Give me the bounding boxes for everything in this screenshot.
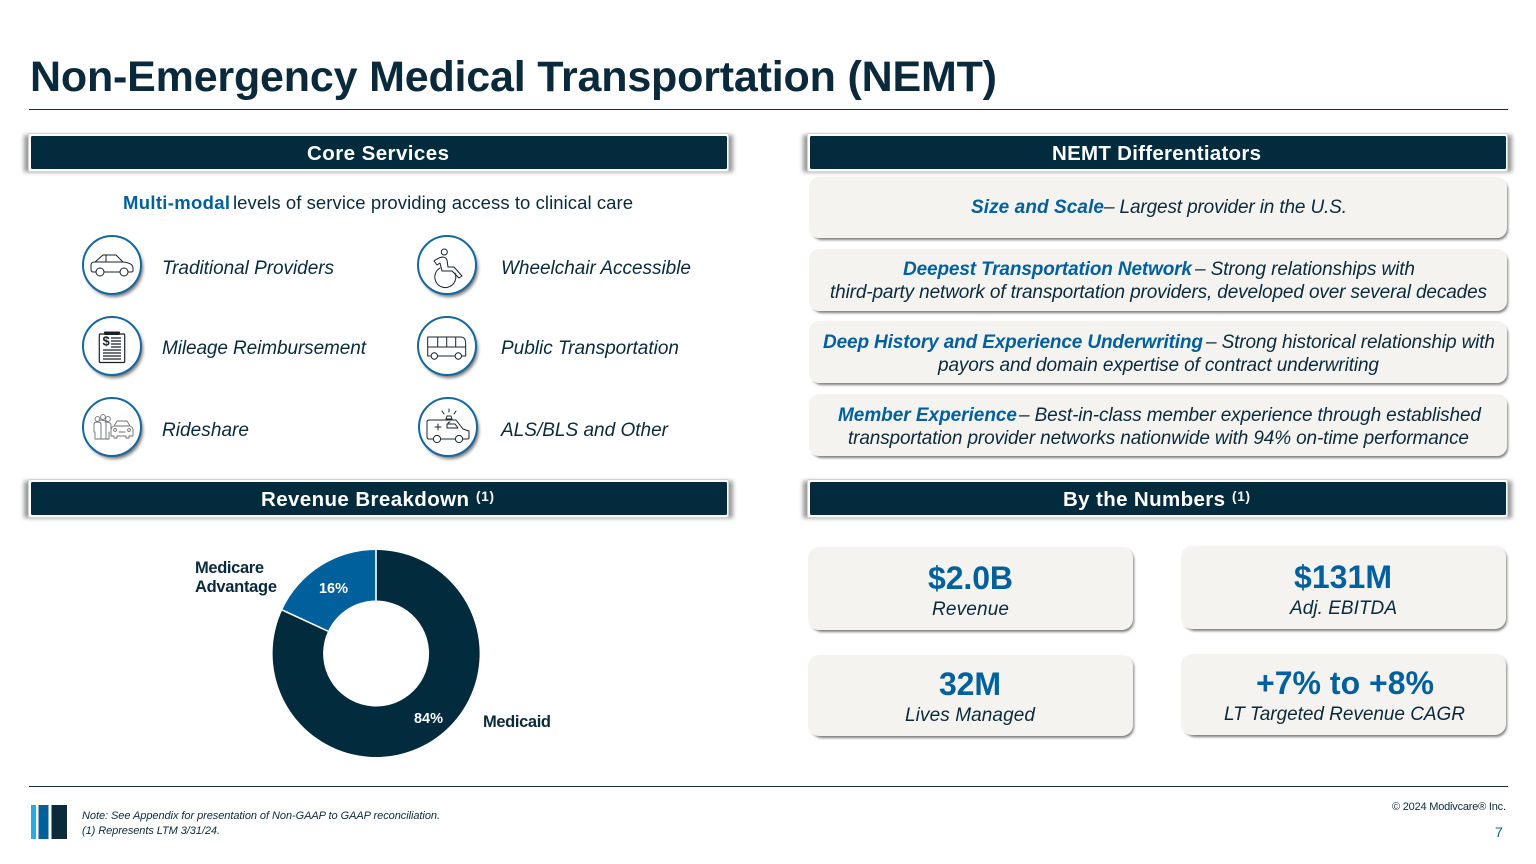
card: member experience bbox=[809, 394, 1508, 458]
card: deep history and experience underwriting: – Strong historical relationship with bbox=[1205, 332, 1495, 353]
label: Medicare Advantage: Medicare bbox=[195, 559, 264, 577]
service: wheelchair accessible bbox=[418, 236, 691, 297]
service: mileage reimbursement: Mileage Reimbursement bbox=[162, 338, 367, 359]
panel header: Core Services: Core Services bbox=[307, 142, 449, 165]
stat: LT targeted revenue CAGR: +7% to +8% bbox=[1256, 665, 1434, 701]
panel: by the numbers bbox=[808, 546, 1507, 738]
page number: 7 bbox=[1495, 824, 1503, 840]
stat: revenue: $2.0B bbox=[928, 560, 1013, 596]
service: ALS/BLS and other bbox=[419, 398, 669, 459]
panel: differentiators bbox=[809, 177, 1508, 458]
stat: revenue bbox=[808, 547, 1134, 632]
card: deep history and experience underwriting: payors and domain expertise of contract underwriting bbox=[937, 355, 1379, 376]
panel: core services bbox=[83, 192, 691, 459]
stat: lives managed: 32M bbox=[939, 666, 1001, 702]
icon: people and car bbox=[94, 415, 133, 439]
service: traditional providers: Traditional Providers bbox=[162, 258, 334, 279]
card: deepest transportation network bbox=[809, 249, 1508, 313]
service: public transportation bbox=[418, 317, 679, 378]
footnotes: Note: See Appendix for presentation of Non-GAAP to GAAP reconciliation. bbox=[82, 810, 440, 822]
card: size and scale: – Largest provider in the U.S. bbox=[1103, 197, 1347, 218]
stat: lives managed: Lives Managed bbox=[905, 705, 1036, 726]
footnotes bbox=[82, 810, 440, 837]
icon: car bbox=[91, 255, 133, 276]
stat: adjusted EBITDA: $131M bbox=[1294, 559, 1392, 595]
card: member experience: – Best-in-class member experience through established bbox=[1018, 405, 1482, 426]
card: deepest transportation network: – Strong relationships with bbox=[1194, 259, 1415, 280]
card: deep history and experience underwriting: Deep History and Experience Underwriting bbox=[823, 332, 1203, 353]
segment: Medicare Advantage 16% bbox=[282, 550, 376, 631]
service: public transportation: Public Transportation bbox=[501, 338, 679, 359]
label: Medicaid: Medicaid bbox=[483, 713, 551, 731]
stat: adjusted EBITDA: Adj. EBITDA bbox=[1289, 598, 1397, 619]
panel header: By the Numbers bbox=[803, 480, 1512, 518]
donut chart: revenue breakdown bbox=[195, 550, 551, 757]
service: rideshare: Rideshare bbox=[162, 420, 249, 441]
card: member experience: transportation provider networks nationwide with 94% on-time performance bbox=[848, 428, 1469, 449]
panel header: Core Services bbox=[24, 134, 733, 172]
icon: wheelchair user bbox=[434, 249, 462, 288]
donut chart: revenue breakdown: 84% bbox=[414, 711, 443, 727]
card: deepest transportation network: third-party network of transportation providers, developed over several decades bbox=[830, 282, 1488, 303]
stat: lives managed bbox=[808, 655, 1134, 738]
logo bbox=[31, 805, 67, 839]
panel header: Revenue Breakdown: Revenue Breakdown bbox=[261, 488, 469, 511]
stat: LT targeted revenue CAGR bbox=[1181, 654, 1507, 737]
panel header: NEMT Differentiators: NEMT Differentiators bbox=[1052, 142, 1261, 165]
card: size and scale: Size and Scale bbox=[971, 197, 1104, 218]
panel header: Revenue Breakdown: (1) bbox=[476, 489, 494, 504]
service: ALS/BLS and other: ALS/BLS and Other bbox=[500, 420, 669, 441]
card: deep history and experience underwriting bbox=[809, 321, 1508, 385]
service: wheelchair accessible: Wheelchair Accessible bbox=[501, 258, 691, 279]
donut chart: revenue breakdown: 16% bbox=[319, 581, 348, 597]
icon: ambulance bbox=[427, 409, 469, 443]
segment: Medicaid 84% bbox=[273, 550, 480, 757]
label: Medicare Advantage: Advantage bbox=[195, 578, 277, 596]
icon: clipboard bbox=[99, 332, 125, 362]
title: Non-Emergency Medical Transportation (NEMT) bbox=[30, 53, 997, 101]
stat: revenue: Revenue bbox=[932, 599, 1009, 620]
card: size and scale bbox=[809, 177, 1508, 240]
icon: clipboard: $ bbox=[102, 334, 110, 348]
service: mileage reimbursement bbox=[83, 317, 367, 378]
panel header: NEMT Differentiators bbox=[803, 134, 1512, 172]
panel header: By the Numbers: By the Numbers bbox=[1063, 488, 1225, 511]
panel header: Revenue Breakdown bbox=[24, 480, 733, 518]
stat: adjusted EBITDA bbox=[1181, 546, 1507, 631]
panel header: By the Numbers: (1) bbox=[1232, 489, 1250, 504]
stat: LT targeted revenue CAGR: LT Targeted Revenue CAGR bbox=[1224, 704, 1465, 725]
subheading: levels of service providing access to clinical care bbox=[233, 192, 633, 213]
card: deepest transportation network: Deepest Transportation Network bbox=[903, 259, 1193, 280]
copyright: © 2024 Modivcare® Inc. bbox=[1392, 801, 1506, 813]
service: rideshare bbox=[83, 398, 249, 459]
card: member experience: Member Experience bbox=[838, 405, 1017, 426]
service: traditional providers bbox=[83, 236, 334, 297]
footnotes: (1) Represents LTM 3/31/24. bbox=[82, 825, 220, 837]
label: Medicare Advantage bbox=[195, 559, 277, 596]
subheading: Multi-modal bbox=[123, 192, 230, 213]
icon: bus bbox=[428, 337, 466, 359]
